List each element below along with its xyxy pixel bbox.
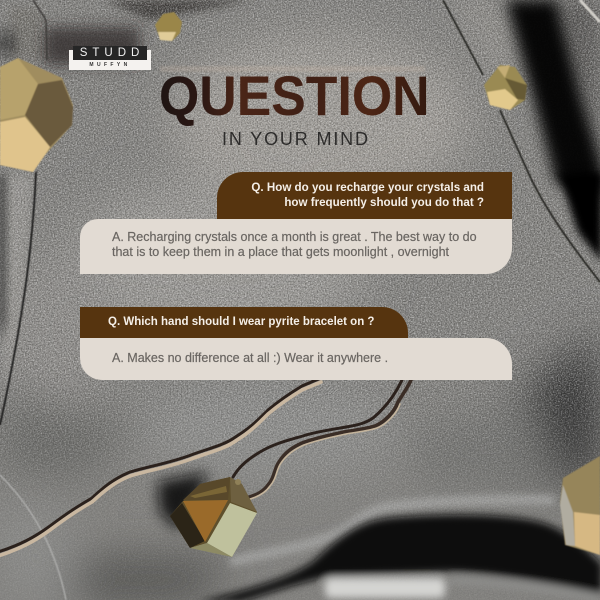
chain strand one: [0, 378, 321, 556]
question 2 text: Q. Which hand should I wear pyrite bracelet on ?: [108, 316, 374, 328]
chain strand three: [245, 380, 411, 500]
logo background plate: [69, 50, 151, 70]
icon: small crystal top: [155, 12, 182, 41]
necklace chain: [0, 378, 411, 556]
icon: crystal right edge: [560, 456, 600, 555]
panel: answer 2: [80, 338, 512, 380]
icon: large crystal top left: [0, 58, 73, 172]
icon: crystal top right: [484, 65, 527, 110]
answer 1 text: A. Recharging crystals once a month is great . The best way to do: [112, 230, 477, 244]
logo subtitle: MUFFYN: [89, 62, 131, 68]
panel: question 1: [217, 172, 512, 219]
logo wordmark: STUDD: [80, 47, 144, 59]
question 1 text: Q. How do you recharge your crystals and: [251, 181, 484, 194]
band behind title: [160, 66, 425, 72]
subtitle: IN YOUR MIND: [222, 129, 370, 149]
answer 2 text: A. Makes no difference at all :) Wear it anywhere .: [112, 351, 388, 365]
title: QUESTION: [159, 64, 430, 127]
logo: Studd Muffyn: [69, 46, 151, 70]
answer 1 text: that is to keep them in a place that gets moonlight , overnight: [112, 245, 449, 259]
icon: pyrite pendant: [158, 472, 257, 557]
question 1 text: how frequently should you do that ?: [284, 196, 484, 209]
question 1 text: [14, 181, 512, 552]
panel: question 2: [80, 307, 408, 338]
chain strand two: [233, 380, 402, 477]
panel: answer 1: [80, 219, 512, 274]
answer 1 text: [14, 230, 508, 552]
